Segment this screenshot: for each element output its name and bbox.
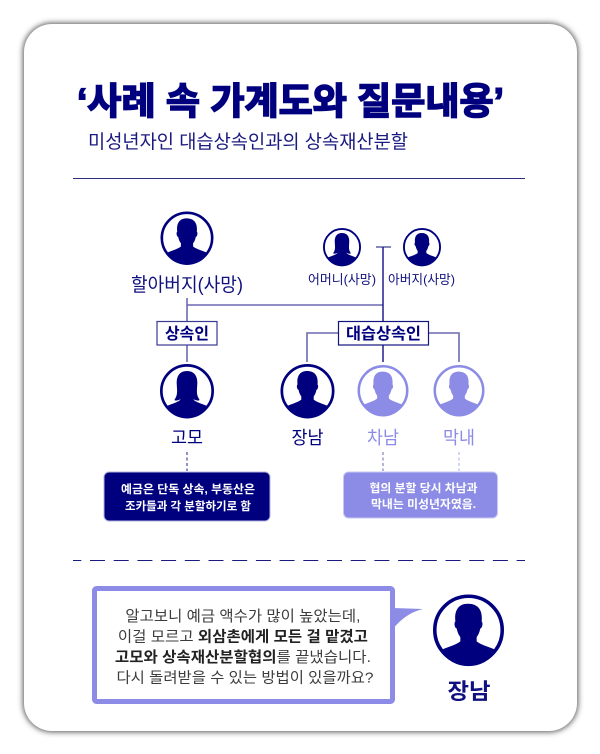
box: heir: 상속인 <box>165 325 209 343</box>
label: father: 아버지(사망) <box>388 272 455 287</box>
label: grandfather: 할아버지(사망) <box>131 274 243 296</box>
note: minors: 협의 분할 당시 차남과 <box>370 481 478 495</box>
label: speaker: 장남 <box>448 679 490 704</box>
dotted connectors to notes <box>187 452 459 471</box>
person: aunt <box>161 365 213 448</box>
person: grandfather <box>131 213 243 296</box>
note: aunt: 조카들과 각 분할하기로 함 <box>125 499 251 513</box>
family tree connectors <box>187 247 459 362</box>
person: second son <box>359 366 407 448</box>
box: representative heir: 대습상속인 <box>346 325 421 343</box>
subtitle: 미성년자인 대습상속인과의 상속재산분할 <box>88 131 408 153</box>
label: eldest son: 장남 <box>292 428 324 448</box>
bubble text: 다시 돌려받을 수 있는 방법이 있을까요? <box>116 670 374 686</box>
note: minors <box>344 472 498 518</box>
person: eldest son <box>282 365 333 448</box>
label: mother: 어머니(사망) <box>308 272 376 287</box>
label: youngest: 막내 <box>443 428 475 448</box>
person: father <box>388 229 455 287</box>
bubble text: 알고보니 예금 액수가 많이 높았는데, <box>125 608 360 625</box>
label: aunt: 고모 <box>171 428 203 448</box>
note: aunt: 예금은 단독 상속, 부동산은 <box>121 482 255 496</box>
box: representative heir <box>338 322 428 345</box>
person: eldest son speaker <box>435 596 502 704</box>
box: heir <box>157 322 217 345</box>
note: aunt <box>104 472 270 521</box>
person: youngest <box>435 366 483 448</box>
bubble text: 이걸 모르고 외삼촌에게 모든 걸 맡겼고 <box>118 628 362 646</box>
bubble text: 고모와 상속재산분할협의 를 끝냈습니다. <box>115 649 368 666</box>
title: ‘사례 속 가계도와 질문내용’ <box>77 81 504 122</box>
note: minors: 막내는 미성년자였음. <box>371 497 476 511</box>
section divider <box>73 560 525 562</box>
speech bubble <box>94 588 423 702</box>
label: second son: 차남 <box>367 428 399 448</box>
person: mother <box>308 229 376 287</box>
header divider <box>73 178 525 180</box>
